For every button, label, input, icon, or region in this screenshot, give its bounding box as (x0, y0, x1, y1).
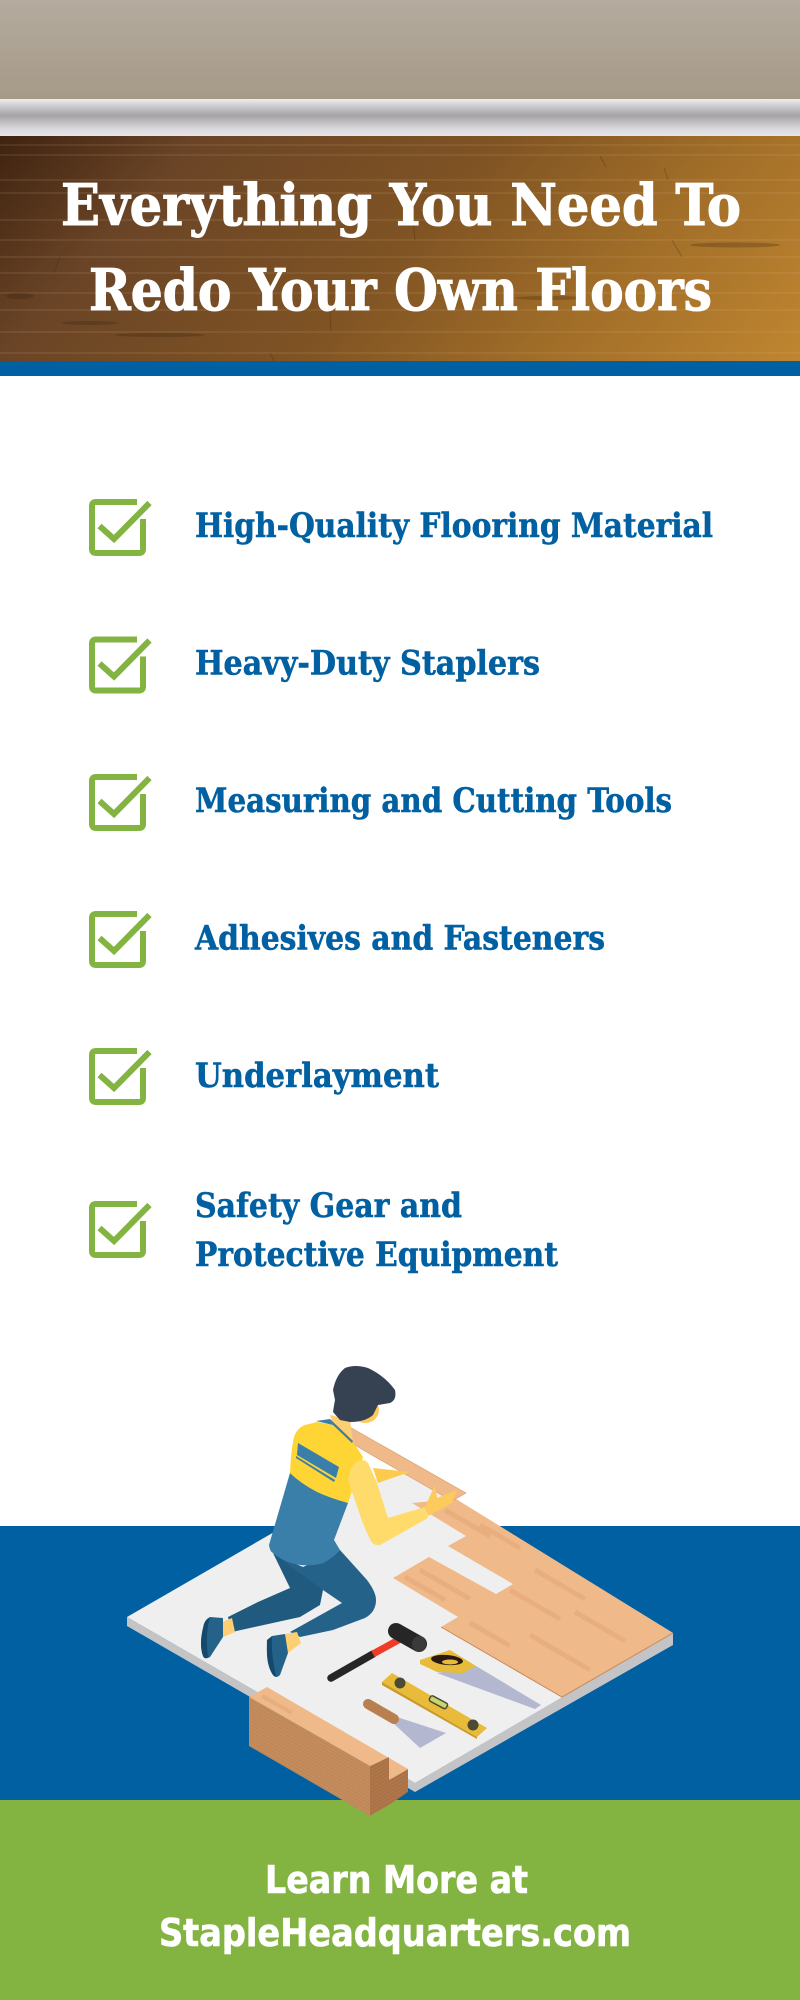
wood floor title banner (0, 136, 800, 361)
green footer band (0, 1800, 800, 2000)
wall band (0, 0, 800, 99)
item: Heavy-Duty Staplers: Heavy-Duty Staplers (195, 644, 540, 684)
item: Safety Gear and Protective Equipment: Safety Gear and (195, 1186, 462, 1226)
front leg (275, 1550, 376, 1637)
wood planks on floor (393, 1499, 673, 1697)
back hand and far arm (373, 1468, 410, 1483)
shoes and socks (201, 1617, 301, 1677)
footer call to action (159, 1858, 631, 1955)
title (61, 172, 741, 324)
platform (127, 1472, 673, 1792)
item: Adhesives and Fasteners (92, 914, 605, 965)
item: Underlayment: Underlayment (195, 1056, 439, 1096)
title: Everything You Need To (61, 172, 741, 239)
hand saw (420, 1650, 541, 1709)
spirit level (382, 1673, 487, 1739)
title: Redo Your Own Floors (89, 257, 712, 324)
checklist (92, 502, 713, 1275)
near hand (425, 1485, 457, 1516)
worker (201, 1366, 457, 1677)
scraper (368, 1704, 446, 1748)
footer call to action: StapleHeadquarters.com (159, 1911, 631, 1955)
item: Safety Gear and Protective Equipment (92, 1186, 558, 1275)
baseboard rail (0, 99, 800, 136)
item: Underlayment (92, 1051, 439, 1102)
back leg (228, 1553, 323, 1632)
flooring illustration (127, 1366, 673, 1816)
wood block (249, 1687, 408, 1816)
hair (333, 1366, 395, 1422)
collar (316, 1419, 353, 1443)
blue background band (0, 1526, 800, 1800)
hammer (331, 1631, 426, 1678)
item: Measuring and Cutting Tools: Measuring and Cutting Tools (195, 781, 672, 821)
footer call to action: Learn More at (265, 1858, 528, 1902)
neck (330, 1415, 353, 1442)
near arm (348, 1460, 428, 1545)
item: High-Quality Flooring Material: High-Quality Flooring Material (195, 506, 713, 546)
item: Safety Gear and Protective Equipment: Protective Equipment (195, 1235, 558, 1275)
item: Adhesives and Fasteners: Adhesives and Fasteners (194, 918, 605, 958)
item: High-Quality Flooring Material (92, 502, 713, 553)
held plank (348, 1426, 466, 1501)
shirt lower (269, 1473, 348, 1565)
item: Measuring and Cutting Tools (92, 777, 672, 828)
shoulder stripes (296, 1443, 339, 1482)
face (351, 1397, 379, 1423)
blue band under banner (0, 361, 800, 376)
item: Heavy-Duty Staplers (92, 640, 540, 690)
shirt yellow yoke (290, 1422, 363, 1503)
